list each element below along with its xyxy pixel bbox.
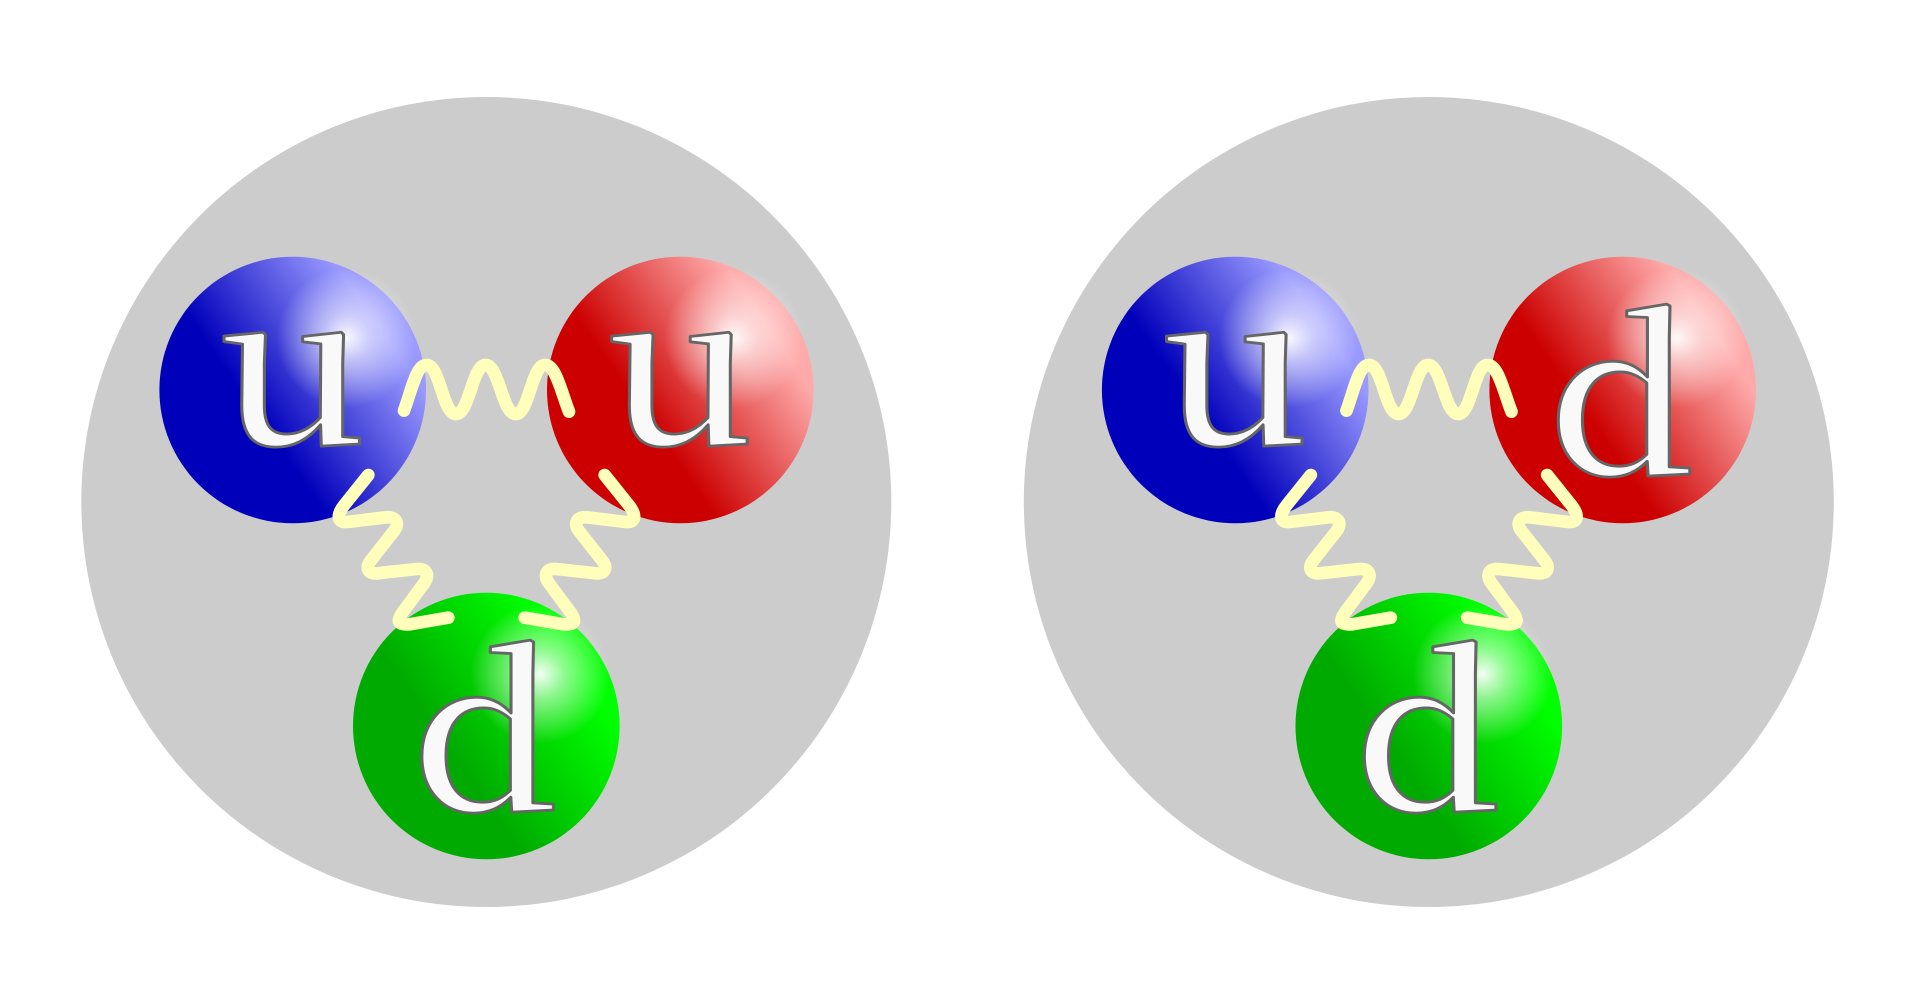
proton body — [81, 97, 891, 907]
down quark: green — [353, 569, 620, 871]
down quark: green: d — [1354, 569, 1502, 871]
up quark: red: u — [604, 202, 756, 505]
down quark: red: d — [1548, 233, 1696, 535]
panel: proton (uud) — [81, 97, 891, 907]
up quark: blue — [159, 202, 426, 523]
gluon wiggles — [1281, 365, 1577, 624]
panel: neutron (udd) — [1024, 97, 1834, 907]
down quark: red — [1489, 233, 1756, 535]
up quark: red — [547, 202, 814, 523]
up quark: blue: u — [217, 202, 369, 505]
neutron body — [1024, 97, 1834, 907]
down quark: green: d — [411, 569, 559, 871]
up quark: blue: u — [1159, 202, 1311, 505]
down quark: green — [1296, 569, 1562, 871]
gluon wiggles — [339, 365, 634, 624]
up quark: blue — [1102, 202, 1368, 523]
